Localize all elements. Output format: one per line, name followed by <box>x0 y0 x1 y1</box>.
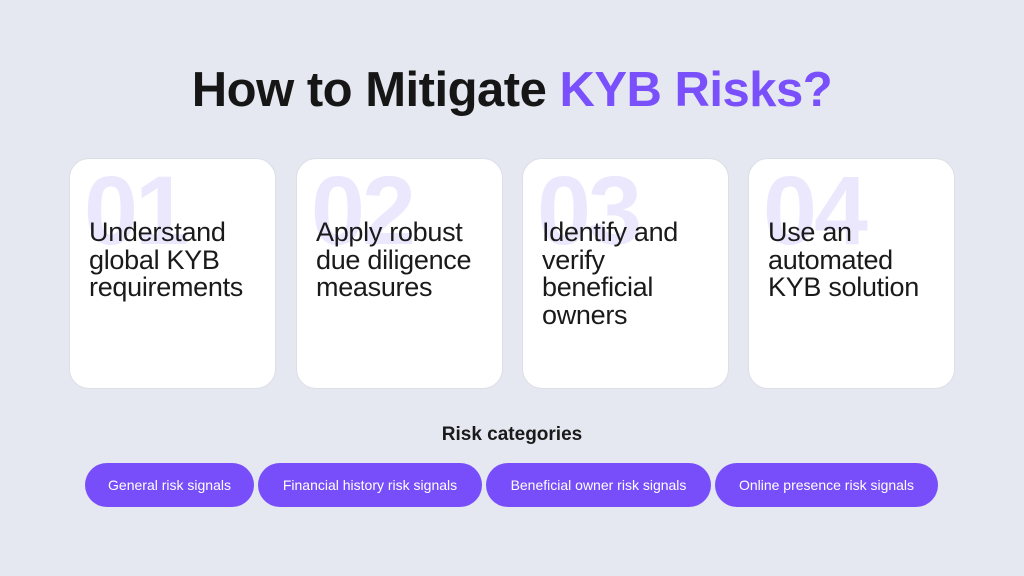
card 02 <box>296 158 503 389</box>
pill: general: General risk signals <box>108 477 231 493</box>
card 02: due diligence <box>316 244 471 274</box>
card 04: automated <box>768 244 893 274</box>
heading: risk categories: Risk categories <box>442 424 582 445</box>
card 01: global KYB <box>89 244 220 274</box>
card 01 <box>69 158 276 389</box>
card 01: requirements <box>89 272 243 302</box>
card 03 <box>522 158 729 389</box>
pill: financial: Financial history risk signals <box>283 477 457 493</box>
pill: beneficial: Beneficial owner risk signals <box>511 477 686 493</box>
card 03: verify <box>542 244 605 274</box>
card 04: Use an <box>768 217 852 247</box>
card 04 <box>748 158 955 389</box>
card 03: 03 <box>537 158 639 265</box>
card 03: owners <box>542 300 627 330</box>
card 01: Understand <box>89 217 226 247</box>
pill: online <box>715 463 938 507</box>
card 04: KYB solution <box>768 272 919 302</box>
card 02: measures <box>316 272 432 302</box>
card 02: 02 <box>311 158 413 265</box>
card 02: Apply robust <box>316 217 462 247</box>
card 03: beneficial <box>542 272 653 302</box>
pill: general <box>85 463 254 507</box>
card 04: 04 <box>763 158 865 265</box>
card 03: Identify and <box>542 217 678 247</box>
pill: beneficial <box>486 463 711 507</box>
title: How to Mitigate KYB Risks? <box>192 63 832 117</box>
pill: online: Online presence risk signals <box>739 477 914 493</box>
pill: financial <box>258 463 482 507</box>
card 01: 01 <box>84 158 186 265</box>
